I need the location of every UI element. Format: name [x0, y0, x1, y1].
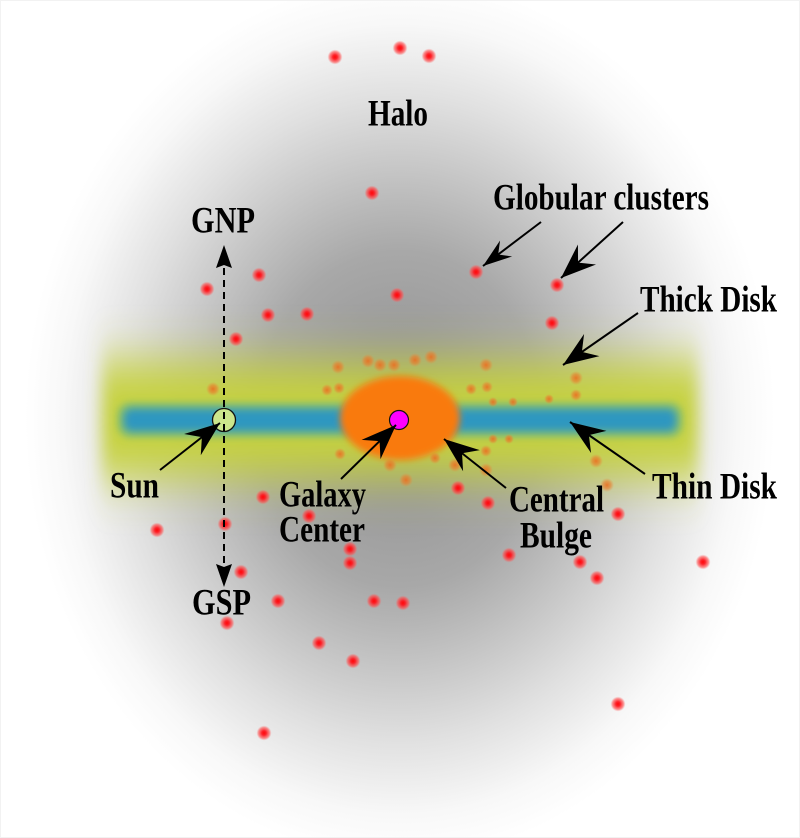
label: Central: Central [509, 480, 604, 520]
label: GSP: GSP [192, 582, 251, 624]
central bulge [340, 376, 460, 460]
arrow: Globular clusters left [483, 222, 541, 266]
label: GNP: GNP [191, 200, 255, 242]
label: Sun: Sun [110, 466, 159, 506]
arrow: Central Bulge [444, 439, 506, 488]
arrow: Thick Disk [563, 313, 638, 365]
arrow: Globular clusters right [561, 222, 623, 278]
arrow: Thin Disk [570, 422, 645, 474]
galaxy center [390, 410, 408, 430]
globular clusters: red [150, 40, 710, 740]
label: Globular clusters: Globular clusters [493, 178, 709, 218]
label: Bulge: Bulge [520, 516, 592, 556]
arrow: Galaxy Center [341, 425, 396, 479]
label: Galaxy: Galaxy [279, 474, 366, 516]
label: Halo: Halo [368, 94, 428, 134]
thick disk [102, 362, 698, 478]
thin disk [118, 403, 682, 437]
label: Center: Center [279, 510, 365, 550]
arrow: Sun [160, 423, 220, 470]
globular clusters: orange [206, 350, 614, 492]
pole axis: GNP to GSP [216, 245, 232, 587]
sun [212, 408, 236, 432]
